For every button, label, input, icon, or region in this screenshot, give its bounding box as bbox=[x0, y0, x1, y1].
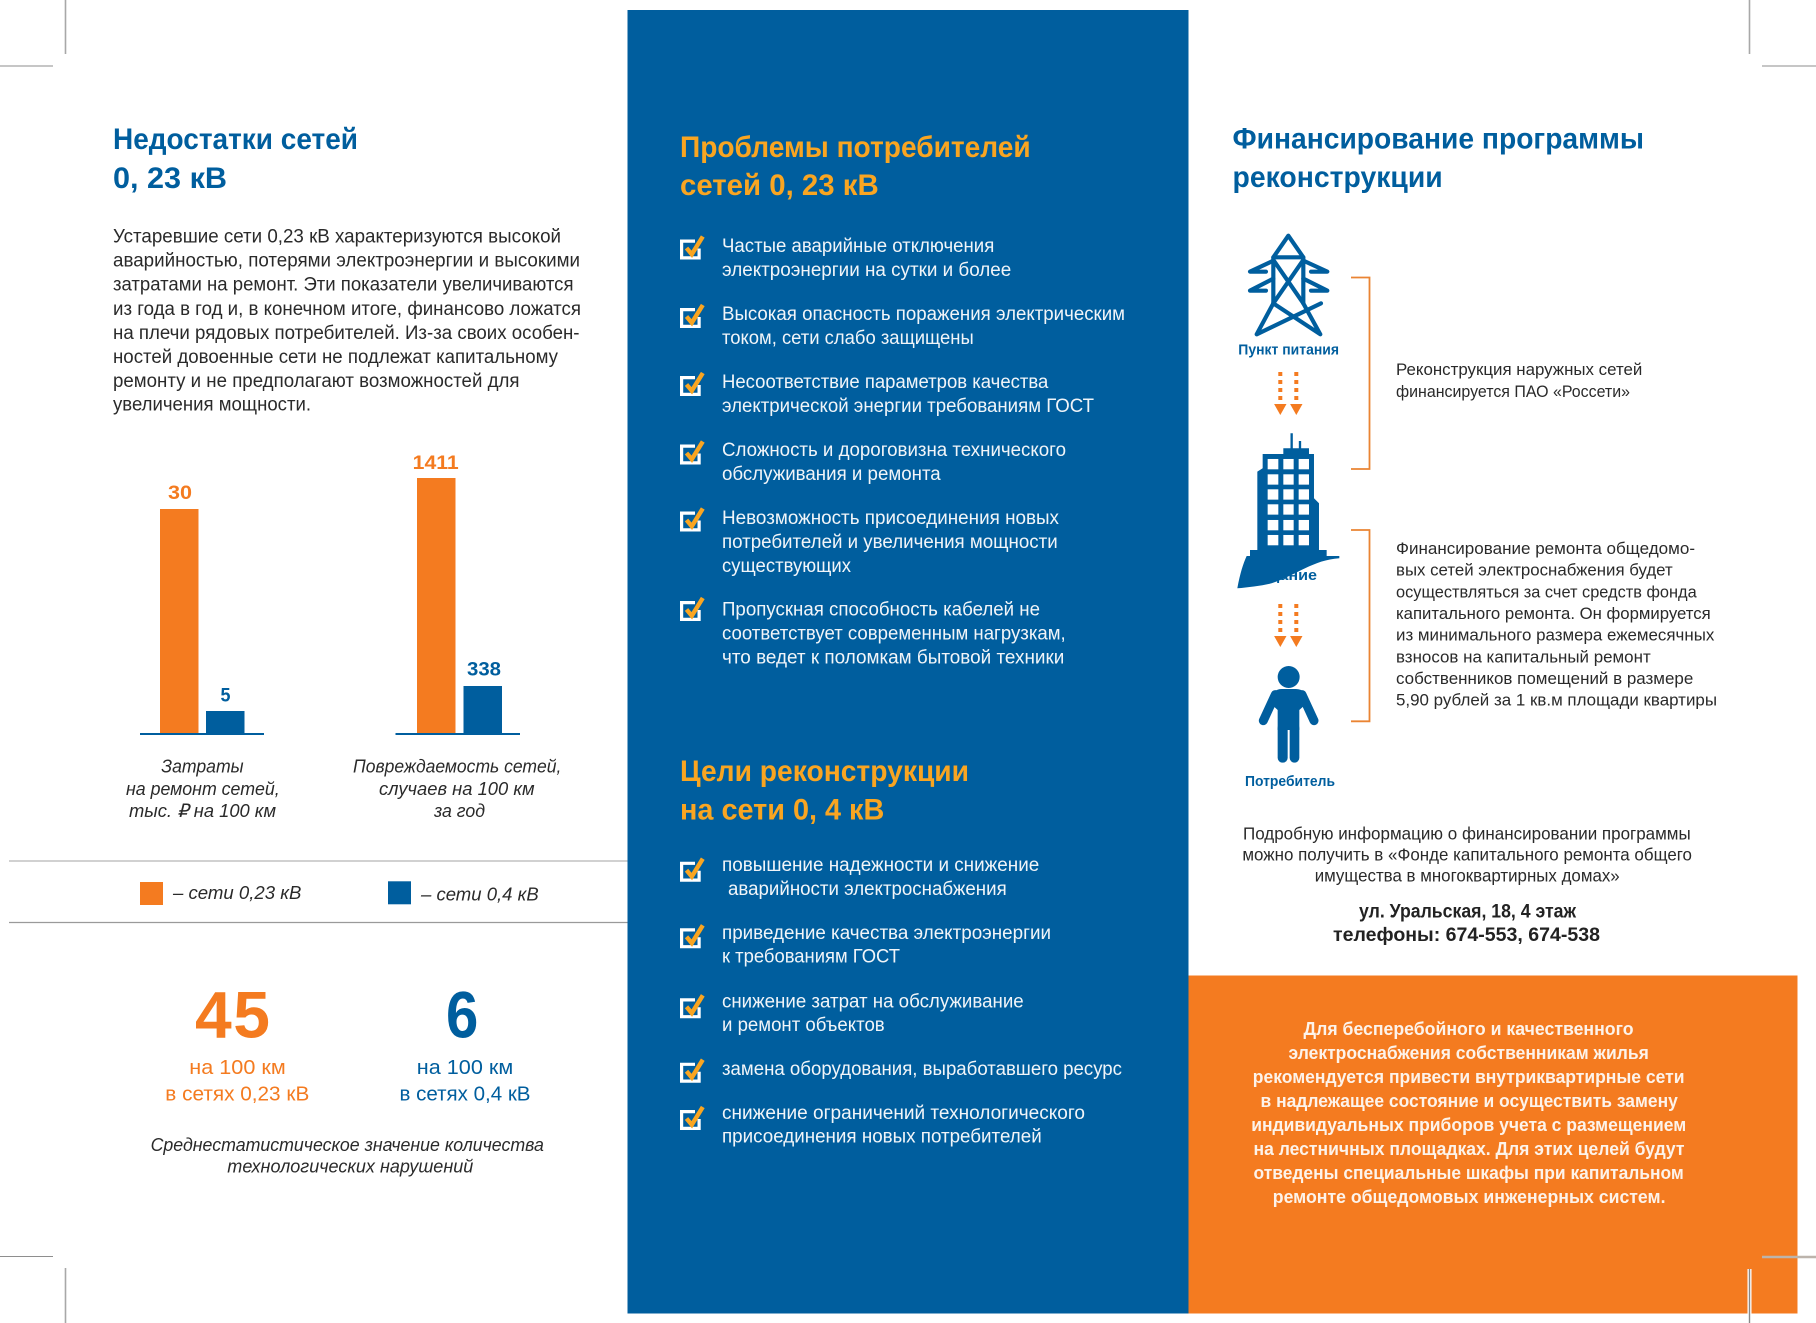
item: GOST quality: приведение качества электроэнергии bbox=[722, 923, 1051, 944]
statistics note bbox=[151, 1134, 544, 1176]
statistic: 45 violations: 45 bbox=[195, 978, 270, 1052]
item: lower costs: снижение затрат на обслуживание bbox=[722, 991, 1024, 1012]
text block: drawbacks description bbox=[113, 226, 581, 416]
text block: capital repair financing bbox=[1396, 540, 1717, 710]
text block: recommendation: отведены специальные шкафы при капитальном bbox=[1254, 1162, 1684, 1183]
panel: orange recommendation box bbox=[1188, 976, 1798, 1314]
item: electric shock: током, сети слабо защищены bbox=[722, 328, 974, 349]
item: replacement: замена оборудования, выработавшего ресурс bbox=[722, 1059, 1122, 1080]
heading: reconstruction goals bbox=[680, 755, 969, 826]
legend bbox=[140, 881, 539, 905]
list: consumer problems bbox=[682, 236, 1125, 668]
heading: network drawbacks: Недостатки сетей bbox=[113, 123, 358, 156]
heading: programme financing: реконструкции bbox=[1232, 161, 1443, 194]
bar chart: network damage rate: 338 bbox=[467, 660, 501, 681]
text block: capital repair financing: 5,90 рублей за 1 кв.м площади квартиры bbox=[1396, 692, 1717, 710]
label: power supply point: Пункт питания bbox=[1238, 342, 1339, 358]
item: electric shock: Высокая опасность поражения электрическим bbox=[722, 304, 1125, 325]
text block: drawbacks description: на плечи рядовых потребителей. Из-за своих особен- bbox=[113, 323, 580, 344]
list: reconstruction goals bbox=[682, 855, 1122, 1148]
text block: capital repair financing: собственников помещений в размере bbox=[1396, 670, 1693, 688]
item: cable capacity: что ведет к поломкам бытовой техники bbox=[722, 648, 1064, 668]
item: outages: электроэнергии на сутки и более bbox=[722, 260, 1011, 281]
item: lower costs: и ремонт объектов bbox=[722, 1015, 885, 1036]
statistics note: технологических нарушений bbox=[227, 1156, 473, 1176]
heading: network drawbacks: 0, 23 кВ bbox=[113, 162, 227, 195]
bracket: Rosseti financed part bbox=[1351, 278, 1370, 469]
item: outages bbox=[682, 236, 1011, 281]
item: outages: Частые аварийные отключения bbox=[722, 236, 994, 257]
item: power quality: Несоответствие параметров качества bbox=[722, 372, 1049, 393]
item: cable capacity: Пропускная способность кабелей не bbox=[722, 600, 1040, 620]
label: consumer: Потребитель bbox=[1245, 774, 1335, 790]
contacts: телефоны: 674-553, 674-538 bbox=[1333, 925, 1600, 946]
item: new connections: существующих bbox=[722, 556, 851, 577]
icon: consumer person bbox=[1263, 666, 1314, 763]
text block: recommendation: рекомендуется привести внутриквартирные сети bbox=[1253, 1066, 1684, 1087]
text block: recommendation: электроснабжения собственникам жилья bbox=[1288, 1042, 1649, 1063]
item: reliability: повышение надежности и снижение bbox=[722, 855, 1039, 876]
heading: network drawbacks bbox=[113, 123, 358, 195]
text block: capital repair financing: из минимального размера ежемесячных bbox=[1396, 627, 1715, 645]
item: new connections: Невозможность присоединения новых bbox=[722, 508, 1059, 529]
legend: – сети 0,23 кВ bbox=[172, 882, 301, 903]
item: maintenance bbox=[682, 440, 1066, 485]
text block: Rosseti financing bbox=[1396, 361, 1642, 401]
item: power quality bbox=[682, 372, 1094, 417]
text block: drawbacks description: затратами на ремонт. Эти показатели увеличиваются bbox=[113, 275, 574, 296]
statistic: 45 violations: в сетях 0,23 кВ bbox=[165, 1082, 309, 1106]
label: building: Здание bbox=[1259, 568, 1317, 584]
chart caption: repair costs: Затраты bbox=[161, 756, 244, 776]
text block: recommendation: на лестничных площадках. Для этих целей будут bbox=[1254, 1138, 1684, 1159]
text block: Rosseti financing: финансируется ПАО «Россети» bbox=[1396, 383, 1630, 401]
statistic: 6 violations: 6 bbox=[446, 978, 478, 1052]
chart caption: damage rate: Повреждаемость сетей, bbox=[353, 756, 561, 776]
text block: capital repair financing: Финансирование ремонта общедомо- bbox=[1396, 540, 1695, 558]
heading: programme financing bbox=[1232, 122, 1644, 194]
bar chart: repair costs: 30 bbox=[168, 483, 192, 504]
heading: reconstruction goals: Цели реконструкции bbox=[680, 755, 969, 788]
text block: drawbacks description: ремонту и не предполагают возможностей для bbox=[113, 371, 520, 392]
text block: recommendation: Для бесперебойного и качественного bbox=[1304, 1018, 1634, 1039]
item: connection limits: присоединения новых потребителей bbox=[722, 1127, 1042, 1148]
text block: recommendation bbox=[1251, 1018, 1686, 1207]
icon: building bbox=[1237, 433, 1339, 588]
statistic: 6 violations: в сетях 0,4 кВ bbox=[400, 1082, 530, 1106]
heading: reconstruction goals: на сети 0, 4 кВ bbox=[680, 794, 884, 826]
bar chart: network damage rate bbox=[396, 453, 520, 735]
text block: drawbacks description: увеличения мощности. bbox=[113, 394, 311, 416]
text block: capital repair financing: взносов на капитальный ремонт bbox=[1396, 648, 1651, 666]
bar chart: repair costs: 5 bbox=[220, 686, 231, 707]
heading: programme financing: Финансирование программы bbox=[1232, 122, 1644, 156]
text block: recommendation: индивидуальных приборов учета с размещением bbox=[1251, 1114, 1686, 1135]
chart caption: repair costs: тыс. ₽ на 100 км bbox=[129, 800, 276, 821]
arrow: tower to building bbox=[1274, 372, 1303, 415]
item: cable capacity bbox=[682, 598, 1066, 668]
statistic: 6 violations bbox=[400, 978, 530, 1106]
item: new connections bbox=[682, 508, 1059, 577]
item: reliability: аварийности электроснабжения bbox=[728, 879, 1007, 900]
text block: drawbacks description: аварийностью, потерями электроэнергии и высокими bbox=[113, 251, 580, 272]
text block: capital repair financing: капитального ремонта. Он формируется bbox=[1396, 605, 1711, 623]
text block: further information: имущества в многоквартирных домах» bbox=[1315, 866, 1620, 886]
chart caption: damage rate bbox=[353, 756, 561, 821]
text block: further information: можно получить в «Фонде капитального ремонта общего bbox=[1242, 844, 1692, 864]
item: maintenance: обслуживания и ремонта bbox=[722, 464, 941, 485]
item: electric shock bbox=[682, 304, 1125, 349]
bar chart: repair costs bbox=[140, 483, 264, 735]
text block: recommendation: ремонте общедомовых инженерных систем. bbox=[1273, 1186, 1666, 1207]
bracket: capital repair fund part bbox=[1351, 530, 1370, 721]
text block: further information: Подробную информацию о финансировании программы bbox=[1243, 823, 1691, 843]
item: connection limits bbox=[682, 1103, 1085, 1148]
heading: consumer problems: Проблемы потребителей bbox=[680, 131, 1031, 164]
contacts: ул. Уральская, 18, 4 этаж bbox=[1359, 901, 1576, 922]
item: cable capacity: соответствует современным нагрузкам, bbox=[722, 624, 1066, 644]
text block: capital repair financing: осуществляться за счет средств фонда bbox=[1396, 583, 1698, 601]
legend: – сети 0,4 кВ bbox=[420, 884, 539, 905]
text block: capital repair financing: вых сетей электроснабжения будет bbox=[1396, 562, 1673, 580]
bar chart: network damage rate: 1411 bbox=[413, 453, 459, 474]
text block: Rosseti financing: Реконструкция наружных сетей bbox=[1396, 361, 1642, 379]
contacts bbox=[1333, 901, 1600, 946]
item: reliability bbox=[682, 855, 1039, 900]
arrow: building to consumer bbox=[1274, 604, 1303, 647]
text block: further information bbox=[1242, 823, 1692, 886]
heading: consumer problems bbox=[680, 131, 1031, 202]
item: lower costs bbox=[682, 991, 1024, 1036]
text block: drawbacks description: ностей довоенные сети не подлежат капитальному bbox=[113, 347, 558, 368]
item: power quality: электрической энергии требованиям ГОСТ bbox=[722, 396, 1094, 417]
item: connection limits: снижение ограничений технологического bbox=[722, 1103, 1085, 1124]
text block: drawbacks description: Устаревшие сети 0,23 кВ характеризуются высокой bbox=[113, 226, 561, 248]
chart caption: repair costs: на ремонт сетей, bbox=[126, 778, 280, 799]
statistics note: Среднестатистическое значение количества bbox=[151, 1134, 544, 1155]
panel: blue centre column bbox=[628, 10, 1188, 1314]
text block: drawbacks description: из года в год и, в конечном итоге, финансово ложатся bbox=[113, 299, 581, 320]
heading: consumer problems: сетей 0, 23 кВ bbox=[680, 169, 879, 202]
text block: recommendation: в надлежащее состояние и осуществить замену bbox=[1260, 1090, 1678, 1111]
statistic: 45 violations: на 100 км bbox=[189, 1056, 286, 1079]
item: GOST quality: к требованиям ГОСТ bbox=[722, 947, 900, 968]
item: new connections: потребителей и увеличения мощности bbox=[722, 532, 1058, 553]
statistic: 45 violations bbox=[165, 978, 309, 1106]
statistic: 6 violations: на 100 км bbox=[417, 1056, 513, 1079]
chart caption: repair costs bbox=[126, 756, 280, 821]
item: GOST quality bbox=[682, 923, 1051, 968]
chart caption: damage rate: за год bbox=[433, 800, 485, 821]
item: maintenance: Сложность и дороговизна технического bbox=[722, 440, 1066, 461]
icon: transmission tower bbox=[1250, 236, 1327, 334]
chart caption: damage rate: случаев на 100 км bbox=[379, 778, 535, 799]
